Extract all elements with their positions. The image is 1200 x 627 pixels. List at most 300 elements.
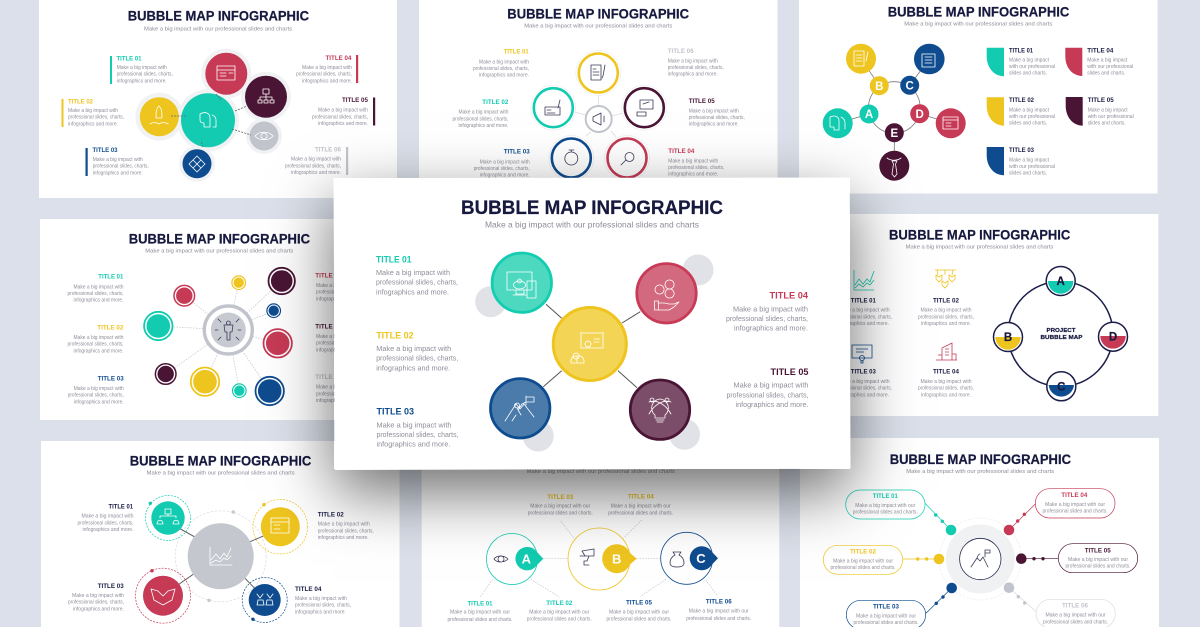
- pill: title 05: TITLE 05: [1085, 547, 1111, 554]
- text block: title 01: Make a big impact with our: [450, 610, 510, 616]
- text block: title 01: [836, 270, 892, 327]
- icon: stars: [935, 270, 956, 288]
- process chain: [480, 520, 718, 597]
- connector: title 03: [926, 583, 957, 613]
- text block: title 04: TITLE 04: [315, 272, 342, 279]
- text block: title 04: infographics and more.: [316, 296, 366, 302]
- icon: bubble C: C: [696, 551, 706, 566]
- drop shadow of main slide: [334, 178, 850, 469]
- text block: title 06: Make a big impact with: [668, 58, 718, 64]
- text block: title 06: [686, 599, 751, 622]
- subtitle: Make a big impact with our professional slides and charts: [527, 469, 675, 475]
- text block: title 03: infographics and more.: [93, 170, 143, 176]
- text block: title 04: [315, 272, 372, 302]
- text block: title 05: Make a big impact with: [734, 381, 808, 390]
- text block: title 01: professional slides, charts,: [376, 278, 458, 287]
- text block: title 03: Make a big impact with: [376, 420, 452, 429]
- text block: title 01: [68, 273, 124, 304]
- bubble map: [475, 253, 714, 452]
- text block: title 05: professional slides, charts,: [312, 114, 368, 120]
- decorative grey discs: [475, 254, 714, 452]
- connector: title 05: [1016, 553, 1058, 564]
- shape: purple tab: [1066, 97, 1083, 126]
- text block: title 02: [918, 270, 974, 327]
- icon: planet eye: [494, 556, 508, 562]
- text block: title 02: professional slides, charts,: [918, 314, 974, 320]
- text block: title 02: TITLE 02: [482, 99, 509, 106]
- pentagon bubble chart: B: [875, 81, 883, 93]
- icon: document and pen: [591, 65, 605, 80]
- text block: title 01: infographics and more.: [479, 73, 529, 79]
- text block: title 02: [62, 98, 124, 127]
- icon: line chart: [854, 270, 874, 290]
- text block: title 04: professional slides, charts,: [316, 290, 372, 296]
- text block: title 02: professional slides and charts.: [527, 617, 592, 623]
- text block: title 03: infographics and more.: [73, 606, 124, 612]
- text block: title 03: professional slides, charts,: [376, 430, 458, 439]
- text block: title 05: professional slides and charts.: [606, 617, 672, 623]
- heading: BUBBLE MAP INFOGRAPHIC: [130, 454, 312, 469]
- text block: title 02: professional slides, charts,: [68, 115, 124, 121]
- icon: browser: [943, 117, 958, 129]
- text block: title 02: [987, 97, 1055, 127]
- icon: heads: [830, 116, 845, 130]
- text block: title 03: infographics and more.: [74, 399, 124, 405]
- text block: title 01: professional slides, charts,: [68, 291, 124, 297]
- icon: heads: [200, 113, 216, 127]
- icon: medal stars: [257, 594, 273, 605]
- pill: title 05: Make a big impact with our: [1068, 557, 1128, 563]
- text block: title 06: TITLE 06: [315, 146, 341, 154]
- icon: browser: [271, 518, 289, 533]
- text block: title 01: infographics and more.: [74, 298, 124, 304]
- bubble: teal: [492, 253, 552, 312]
- text block: title 05: [726, 367, 809, 409]
- bubble: purple: [630, 380, 690, 439]
- text block: title 03: TITLE 03: [92, 147, 118, 154]
- text block: title 01: professional slides, charts,: [117, 72, 173, 78]
- circular project map: PROJECT: [1046, 328, 1076, 334]
- text block: title 03: Make a big impact with: [480, 159, 530, 165]
- text block: title 06: professional slides, charts,: [316, 391, 372, 397]
- text block: title 03: [528, 494, 593, 516]
- text block: title 03: [68, 583, 124, 612]
- text block: title 02: TITLE 02: [68, 98, 93, 106]
- text block: title 01: Make a big impact with: [74, 284, 124, 290]
- text block: title 04: TITLE 04: [326, 55, 352, 62]
- text block: title 01: professional slides, charts,: [473, 66, 529, 72]
- text block: title 02: [452, 99, 509, 129]
- icon: document: [854, 51, 868, 66]
- text block: title 05: Make a big impact: [1088, 107, 1128, 113]
- centre hub: [939, 518, 1021, 600]
- pill: title 03: [846, 600, 926, 627]
- panel: slide bottom left: [41, 441, 400, 627]
- text block: title 04: [608, 493, 673, 516]
- text block: title 03: TITLE 03: [504, 149, 530, 156]
- text block: title 03: [987, 147, 1055, 177]
- circular project map: [994, 266, 1128, 401]
- bubble map: [144, 268, 295, 405]
- text block: title 05: TITLE 05: [342, 97, 368, 104]
- text block: title 05: infographics and more.: [316, 347, 366, 353]
- text block: title 04: TITLE 04: [770, 290, 809, 301]
- text block: title 05: professional slides, charts,: [689, 115, 745, 121]
- icon: tie: [887, 158, 901, 177]
- text block: title 04: Make a big impact with: [920, 379, 972, 385]
- subtitle: Make a big impact with our professional slides and charts: [906, 469, 1054, 475]
- shape: teal tab: [987, 48, 1004, 76]
- panel: slide bottom centre: [422, 440, 779, 627]
- text block: title 05: TITLE 05: [626, 599, 652, 606]
- text block: title 01: TITLE 01: [108, 504, 133, 511]
- connector: title 04: [1004, 504, 1035, 535]
- text block: title 04: Make a big impact with our: [611, 504, 671, 510]
- panel: slide bottom right: [800, 438, 1159, 627]
- text block: title 04: Make a big impact with: [295, 596, 347, 602]
- text block: title 03: [836, 345, 892, 398]
- text block: title 06: professional slides and charts.: [686, 616, 751, 622]
- text block: title 04: infographics and more.: [734, 324, 808, 333]
- icon: presentation trophy: [580, 549, 594, 565]
- icon: bubble B: B: [612, 552, 621, 566]
- text block: title 03: Make a big impact: [1009, 157, 1050, 163]
- pentagon bubble chart: C: [906, 80, 914, 92]
- text block: title 05: [315, 323, 372, 353]
- text block: title 05: Make a big impact with our: [609, 609, 669, 615]
- text block: title 02: Make a big impact with: [920, 308, 972, 314]
- text block: title 05: TITLE 05: [689, 98, 715, 105]
- pill: title 04: [1035, 489, 1115, 518]
- text block: title 03: TITLE 03: [98, 375, 124, 382]
- text block: title 01: [376, 254, 458, 296]
- text block: title 06: professional slides, charts,: [668, 65, 724, 71]
- heading: BUBBLE MAP INFOGRAPHIC: [461, 198, 723, 219]
- text block: title 05: Make a big impact with: [318, 108, 368, 114]
- pill: title 01: [846, 490, 925, 519]
- text block: title 03: professional slides, charts,: [93, 164, 149, 170]
- text block: title 04: infographics and more.: [302, 78, 352, 84]
- text block: title 01: [110, 56, 173, 84]
- text block: title 01: Make a big impact with: [838, 308, 890, 314]
- text block: title 01: with our professional: [1009, 64, 1055, 70]
- icon: bubble C: [690, 546, 718, 570]
- icon: browser: [217, 66, 235, 80]
- text block: title 01: TITLE 01: [98, 273, 124, 280]
- text block: title 02: professional slides, charts,: [452, 116, 508, 122]
- subtitle: Make a big impact with our professional slides and charts: [906, 244, 1053, 250]
- pill: title 02: [823, 545, 903, 574]
- panel: slide top right: [799, 0, 1158, 194]
- pill: title 04: Make a big impact with our: [1045, 502, 1105, 508]
- panel: slide top left: [39, 0, 397, 198]
- pentagon bubble chart: E: [890, 128, 898, 140]
- bubble map: [135, 49, 291, 182]
- text block: title 05: infographics and more.: [736, 400, 808, 409]
- icon: puzzle: [189, 156, 205, 172]
- icon: hierarchy: [258, 89, 274, 103]
- text block: title 01: TITLE 01: [116, 56, 142, 62]
- subtitle: Make a big impact with our professional slides and charts: [145, 248, 293, 254]
- icon: rocket: [150, 106, 168, 124]
- text block: title 02: with our professional: [1009, 114, 1055, 120]
- text block: title 03: Make a big impact with: [74, 386, 124, 392]
- text block: title 04: professional slides, charts,: [295, 603, 351, 609]
- text block: title 04: [1065, 48, 1133, 77]
- circular project map: BUBBLE MAP: [1040, 335, 1083, 341]
- connectors: [543, 304, 640, 388]
- circular project map: C: [1057, 381, 1065, 393]
- icon: bubble A: [515, 547, 543, 570]
- text block: title 04: TITLE 04: [1087, 48, 1114, 55]
- text block: title 04: professional slides and charts.: [608, 510, 673, 516]
- bubble: red: [637, 264, 696, 323]
- panel: slide top centre: [419, 0, 778, 200]
- text block: title 04: Make a big impact with: [302, 65, 352, 71]
- text block: title 01: Make a big impact with: [117, 65, 167, 71]
- text block: title 05: Make a big impact with: [316, 334, 366, 340]
- text block: title 02: Make a big impact with: [74, 335, 124, 341]
- pill: title 04: professional slides and charts.: [1042, 509, 1108, 515]
- icon: magnifier: [621, 152, 634, 165]
- pentagon bubble chart: D: [916, 109, 924, 121]
- text block: title 04: slides and charts.: [1087, 71, 1125, 77]
- text block: title 04: Make a big impact with: [316, 283, 366, 289]
- text block: title 06: infographics and more.: [291, 170, 341, 176]
- text block: title 03: infographics and more.: [480, 173, 530, 179]
- icon: bubble A: A: [522, 552, 532, 566]
- text block: title 04: TITLE 04: [628, 493, 654, 500]
- pill: title 03: Make a big impact with our: [856, 613, 916, 619]
- text block: title 01: [987, 48, 1055, 77]
- panel: slide middle right: [800, 214, 1158, 416]
- text block: title 03: [474, 149, 530, 179]
- text block: title 05: [606, 599, 672, 623]
- text block: title 04: infographics and more.: [921, 392, 971, 398]
- text block: title 03: professional slides and charts.: [528, 510, 593, 516]
- text block: title 02: professional slides, charts,: [318, 528, 374, 534]
- text block: title 02: infographics and more.: [74, 348, 124, 354]
- text block: title 04: TITLE 04: [295, 586, 322, 593]
- text block: title 01: TITLE 01: [1009, 48, 1033, 55]
- text block: title 02: [68, 324, 124, 354]
- text block: title 03: TITLE 03: [547, 494, 574, 501]
- text block: title 03: [86, 147, 149, 176]
- heading: BUBBLE MAP INFOGRAPHIC: [129, 231, 310, 246]
- subtitle: Make a big impact with our professional slides and charts: [144, 26, 292, 32]
- text block: title 01: [473, 49, 529, 79]
- icon: climber with flag: [971, 550, 990, 567]
- shape: yellow tab: [987, 97, 1004, 126]
- bubble: yellow centre: [553, 308, 626, 380]
- text block: title 05: [1066, 97, 1134, 127]
- text block: title 05: infographics and more.: [318, 121, 368, 127]
- text block: title 04: [668, 148, 724, 178]
- text block: title 06: Make a big impact with: [291, 157, 341, 163]
- text block: title 05: with our professional: [1088, 114, 1134, 120]
- pentagon bubble chart: [823, 44, 966, 181]
- text block: title 06: TITLE 06: [706, 599, 732, 606]
- text block: title 04: Make a big impact: [1087, 57, 1128, 63]
- text block: title 03: professional slides, charts,: [836, 386, 892, 392]
- text block: title 04: infographics and more.: [668, 172, 718, 178]
- text block: title 04: infographics and more.: [295, 609, 346, 615]
- icon: coins in hand: [654, 280, 679, 310]
- text block: title 02: [527, 600, 592, 623]
- subtitle: Make a big impact with our professional slides and charts: [485, 219, 699, 229]
- text block: title 03: Make a big impact with: [93, 157, 143, 163]
- text block: title 02: slides and charts.: [1009, 121, 1047, 127]
- text block: title 02: professional slides, charts,: [376, 354, 458, 363]
- text block: title 04: [918, 343, 974, 398]
- icon: person with arrows: [215, 319, 241, 340]
- icon: handshake: [151, 589, 175, 605]
- text block: title 05: infographics and more.: [689, 122, 739, 128]
- text block: title 04: Make a big impact with: [733, 304, 808, 313]
- pill: title 02: Make a big impact with our: [833, 558, 893, 564]
- text block: title 03: with our professional: [1009, 164, 1055, 170]
- pill: title 01: Make a big impact with our: [855, 503, 916, 509]
- subtitle: Make a big impact with our professional slides and charts: [904, 22, 1052, 28]
- pill: title 05: [1058, 544, 1138, 573]
- text block: title 02: Make a big impact with: [318, 522, 370, 528]
- text block: title 02: infographics and more.: [458, 123, 508, 129]
- text block: title 01: professional slides, charts,: [836, 314, 892, 320]
- text block: title 01: infographics and more.: [82, 527, 134, 533]
- icon: certificate: [852, 345, 872, 363]
- text block: title 03: professional slides, charts,: [68, 600, 124, 606]
- text block: title 01: [78, 504, 134, 533]
- text block: title 05: professional slides, charts,: [316, 341, 372, 347]
- text block: title 06: [668, 48, 724, 78]
- text block: title 05: TITLE 05: [770, 367, 809, 378]
- text block: title 03: professional slides, charts,: [68, 393, 124, 399]
- text block: title 01: TITLE 01: [504, 49, 529, 56]
- text block: title 04: with our professional: [1087, 64, 1133, 70]
- icon: hierarchy people: [157, 509, 179, 524]
- text block: title 06: [315, 374, 372, 404]
- icon: bulb with atom: [649, 398, 671, 422]
- text block: title 02: infographics and more.: [376, 363, 450, 372]
- text block: title 03: slides and charts.: [1009, 171, 1047, 177]
- icon: bubble B: [602, 544, 637, 573]
- text block: title 02: Make a big impact with: [458, 110, 509, 116]
- icon: building: [936, 343, 957, 360]
- subtitle: Make a big impact with our professional slides and charts: [524, 24, 672, 30]
- shape: blue tab: [987, 147, 1004, 175]
- text block: title 01: professional slides, charts,: [78, 520, 134, 526]
- text block: title 03: infographics and more.: [376, 440, 450, 449]
- text block: title 04: Make a big impact with: [668, 158, 718, 164]
- icon: mountain climber: [505, 396, 534, 421]
- icon: megaphone: [593, 113, 604, 125]
- text block: title 03: [376, 407, 458, 449]
- pill: title 01: TITLE 01: [873, 493, 898, 500]
- text block: title 01: TITLE 01: [851, 297, 876, 304]
- text block: title 04: professional slides, charts,: [726, 314, 808, 323]
- text block: title 02: TITLE 02: [546, 600, 573, 607]
- pill: title 01: professional slides and charts.: [853, 510, 918, 516]
- heading: BUBBLE MAP INFOGRAPHIC: [890, 452, 1071, 467]
- text block: title 01: [448, 600, 512, 623]
- pill: title 06: [1036, 599, 1115, 627]
- text block: title 02: TITLE 02: [1009, 97, 1034, 104]
- text block: title 04: [296, 55, 358, 84]
- text block: title 04: TITLE 04: [668, 148, 695, 155]
- text block: title 05: professional slides, charts,: [726, 390, 808, 399]
- panel: main slide: [334, 178, 850, 470]
- text block: title 01: infographics and more.: [117, 78, 167, 84]
- text block: title 06: infographics and more.: [316, 398, 366, 404]
- text block: title 02: Make a big impact with our: [529, 609, 590, 615]
- text block: title 03: professional slides, charts,: [474, 166, 530, 172]
- icon: laptop pen: [545, 100, 560, 115]
- text block: title 01: Make a big impact with: [479, 59, 529, 65]
- text block: title 05: TITLE 05: [1088, 97, 1114, 104]
- text block: title 03: TITLE 03: [98, 583, 124, 590]
- pill: title 03: professional slides and charts.: [854, 620, 918, 626]
- icon: eye: [255, 132, 273, 140]
- text block: title 06: infographics and more.: [668, 72, 718, 78]
- heading: BUBBLE MAP INFOGRAPHIC: [507, 6, 689, 21]
- icon: money bag: [670, 552, 684, 567]
- pill: title 06: Make a big impact with our: [1046, 613, 1106, 619]
- text block: title 04: [295, 586, 351, 615]
- text block: title 01: TITLE 01: [376, 254, 412, 265]
- icon: stopwatch: [565, 150, 578, 165]
- text block: title 02: TITLE 02: [97, 324, 124, 331]
- text block: title 01: Make a big impact with: [376, 268, 450, 277]
- text block: title 05: TITLE 05: [315, 323, 342, 330]
- text block: title 05: [312, 97, 375, 127]
- icon: monitor and phone: [507, 272, 536, 298]
- text block: title 05: [689, 98, 745, 128]
- text block: title 02: professional slides, charts,: [68, 342, 124, 348]
- pill: title 03: TITLE 03: [873, 603, 899, 610]
- text block: title 03: TITLE 03: [1009, 147, 1034, 154]
- pentagon bubble chart: A: [865, 109, 873, 121]
- bubble: blue: [490, 379, 550, 438]
- text block: title 01: infographics and more.: [376, 287, 449, 296]
- text block: title 01: Make a big impact with: [82, 514, 134, 520]
- connector: title 02: [903, 554, 944, 564]
- text block: title 04: professional slides, charts,: [296, 72, 352, 78]
- text block: title 06: [285, 146, 348, 176]
- pill: title 06: TITLE 06: [1062, 602, 1088, 609]
- text block: title 01: professional slides and charts.: [448, 617, 512, 623]
- connector: title 06: [1004, 582, 1040, 615]
- text block: title 02: infographics and more.: [68, 121, 118, 127]
- text block: title 03: TITLE 03: [851, 369, 876, 376]
- text block: title 04: professional slides, charts,: [668, 165, 724, 171]
- pill: title 02: TITLE 02: [850, 548, 876, 555]
- text block: title 03: Make a big impact with our: [530, 504, 591, 510]
- text block: title 02: Make a big impact with: [68, 108, 118, 114]
- text block: title 02: [318, 512, 374, 541]
- text block: title 01: infographics and more.: [839, 321, 889, 327]
- text block: title 01: Make a big impact: [1009, 57, 1050, 63]
- icon: presentation: [637, 100, 653, 116]
- circular project map: B: [1004, 332, 1012, 344]
- text block: title 02: TITLE 02: [933, 297, 959, 304]
- shape: red tab: [1065, 48, 1082, 76]
- text block: title 04: [726, 290, 809, 333]
- bubble map: [531, 50, 667, 180]
- text block: title 02: infographics and more.: [318, 535, 369, 541]
- text block: title 06: professional slides, charts,: [285, 163, 341, 169]
- circular project map: A: [1057, 276, 1065, 288]
- text block: title 05: Make a big impact with: [689, 108, 739, 114]
